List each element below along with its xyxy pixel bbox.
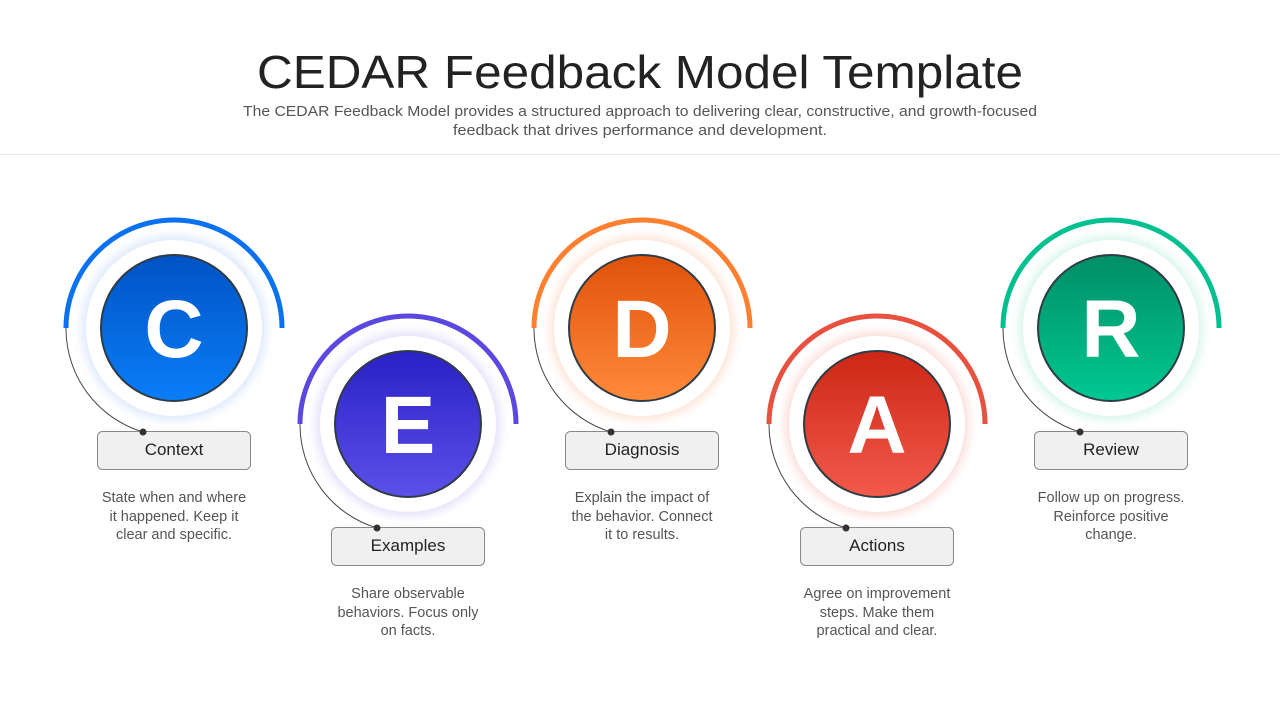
step: Examples: on facts.: [381, 623, 435, 639]
step: Examples: Examples: [371, 536, 445, 555]
step: Examples: E: [381, 380, 435, 471]
step: Actions: Agree on improvement: [804, 586, 950, 602]
step: Review: change.: [1085, 527, 1137, 543]
subtitle: [243, 103, 1037, 139]
step: Review: R: [1081, 284, 1141, 375]
step: Context: C: [144, 284, 204, 375]
step: Actions: Actions: [849, 536, 905, 555]
step: Diagnosis: D: [612, 284, 672, 375]
step: Review: [1003, 220, 1219, 543]
step: Context: clear and specific.: [116, 527, 232, 543]
step: Actions: practical and clear.: [817, 623, 937, 639]
step: Examples: behaviors. Focus only: [337, 605, 479, 621]
step: Diagnosis: Explain the impact of: [575, 490, 710, 506]
step: Context: Context: [145, 440, 204, 459]
step: Examples: [300, 316, 516, 639]
subtitle: The CEDAR Feedback Model provides a structured approach to delivering clear, constructive, and growth-focused: [243, 103, 1037, 120]
step: Context: State when and where: [102, 490, 246, 506]
step: Actions: A: [847, 380, 907, 471]
step: Diagnosis: Diagnosis: [605, 440, 679, 459]
step: Diagnosis: [534, 220, 750, 543]
step: Review: Reinforce positive: [1053, 509, 1169, 525]
step: Context: [66, 220, 282, 543]
step: Review: Follow up on progress.: [1038, 490, 1184, 506]
step: Actions: steps. Make them: [820, 605, 934, 621]
subtitle: feedback that drives performance and development.: [453, 122, 827, 139]
step: Context: it happened. Keep it: [110, 509, 238, 525]
step: Examples: Share observable: [351, 586, 465, 602]
step: Actions: [769, 316, 985, 639]
step: Diagnosis: it to results.: [605, 527, 679, 543]
title: CEDAR Feedback Model Template: [257, 46, 1023, 98]
step: Review: Review: [1083, 440, 1140, 459]
step: Diagnosis: the behavior. Connect: [571, 509, 713, 525]
